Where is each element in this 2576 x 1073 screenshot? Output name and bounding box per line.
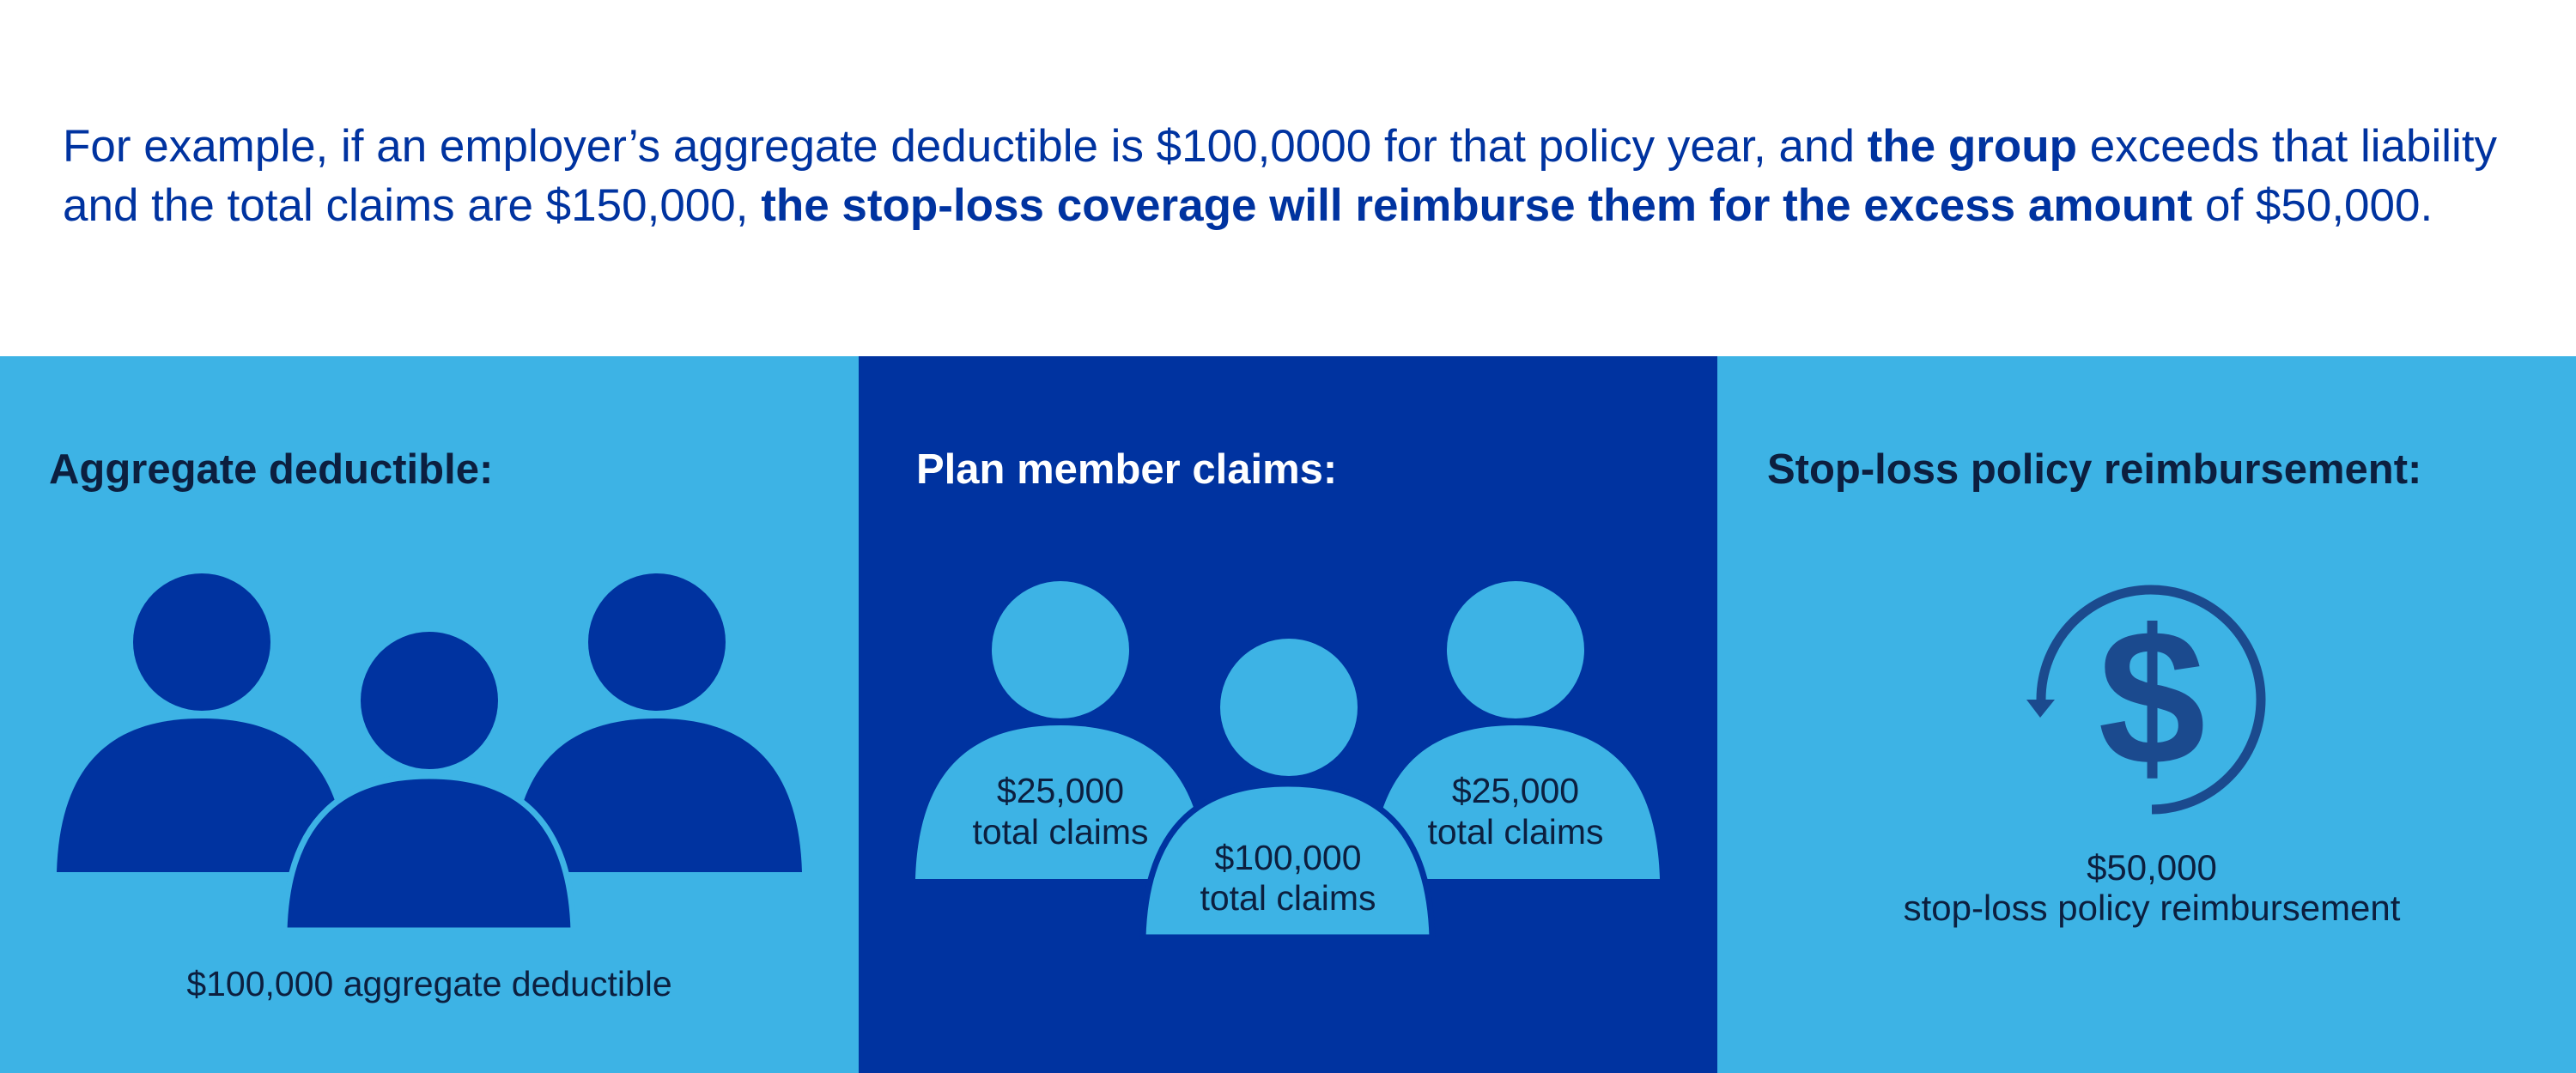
heading: plan member claims: Plan member claims: (916, 446, 1337, 493)
panel: stop-loss reimbursement (1717, 356, 2576, 1073)
label: right member claims: total claims (1427, 812, 1604, 852)
label: right member claims: $25,000 (1452, 771, 1579, 810)
caption: stop-loss reimbursement: stop-loss policy reimbursement (1904, 888, 2401, 928)
panel: plan member claims (859, 356, 1717, 1073)
icon: dollar with circular arrow (2026, 589, 2261, 809)
heading: aggregate deductible: Aggregate deductible: (49, 446, 493, 493)
intro text (63, 121, 2497, 231)
intro text: and the total claims are $150,000, the stop-loss coverage will reimburse them for the excess amount of $50,000. (63, 180, 2433, 231)
icon: three people (aggregate deductible) (57, 573, 802, 931)
caption: stop-loss reimbursement: $50,000 (2087, 847, 2217, 888)
label: middle member claims: $100,000 (1214, 838, 1362, 877)
icon: three people with claims (915, 581, 1660, 937)
icon: dollar with circular arrow: $ (2098, 589, 2206, 805)
label: middle member claims: total claims (1200, 878, 1376, 918)
caption: aggregate deductible: $100,000 aggregate deductible (186, 964, 672, 1003)
panel: aggregate deductible (0, 356, 859, 1073)
label: left member claims: $25,000 (997, 771, 1124, 810)
heading: stop-loss reimbursement: Stop-loss policy reimbursement: (1767, 446, 2421, 493)
intro text: For example, if an employer’s aggregate deductible is $100,0000 for that policy year, and the group exceeds that liability (63, 121, 2497, 172)
label: left member claims: total claims (972, 812, 1149, 852)
